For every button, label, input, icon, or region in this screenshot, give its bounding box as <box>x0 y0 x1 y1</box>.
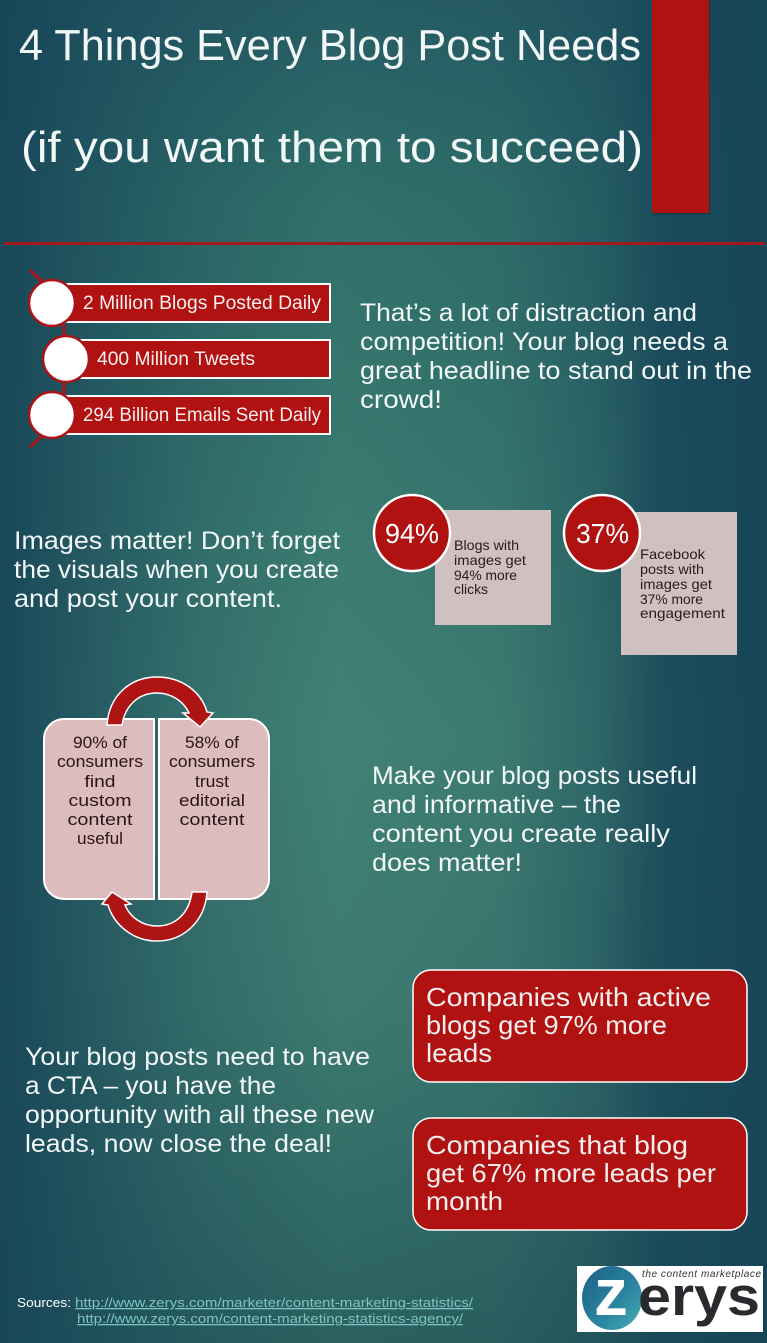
left panel: custom content: content <box>68 810 133 829</box>
right panel: editorial content: trust <box>195 772 229 791</box>
right panel: editorial content: consumers <box>169 752 255 771</box>
text block: call to action advice: Your blog posts need to have <box>25 1043 370 1071</box>
stat bar: tweets: 400 Million Tweets <box>97 349 255 370</box>
stat card: 94%: 94% <box>385 518 439 549</box>
stat card: 37%: 37% more <box>640 591 703 607</box>
title: (if you want them to succeed) <box>21 123 643 172</box>
stat bar: blogs <box>29 280 330 326</box>
stat card: 94%: clicks <box>454 581 488 597</box>
arrow: bottom clockwise <box>102 892 207 941</box>
text block: images advice: Images matter! Don’t forget <box>14 527 340 555</box>
text block: useful content advice: does matter! <box>372 849 522 877</box>
text block: headline advice: great headline to stand out in the <box>360 357 752 385</box>
sources: http://www.zerys.com/marketer/content-marketing-statistics/ <box>75 1295 473 1310</box>
text block: useful content advice: content you create really <box>372 820 671 848</box>
left panel: custom content: 90% of <box>73 733 127 752</box>
left panel: custom content <box>44 719 154 899</box>
logo: zerys: the content marketplace <box>642 1269 761 1280</box>
stat card: 37%: Facebook <box>640 546 706 562</box>
panel: volume statistics list <box>29 270 330 447</box>
text block: call to action advice <box>25 1043 375 1158</box>
callout: active blogs leads <box>413 970 747 1082</box>
stat card: 94%: Blogs with <box>454 537 519 553</box>
arrow: top clockwise <box>107 677 213 727</box>
stat card: 37%: engagement <box>640 605 725 621</box>
stat card: 37%: images get <box>640 576 712 592</box>
text block: headline advice <box>360 299 752 414</box>
title: 4 Things Every Blog Post Needs <box>19 21 641 70</box>
callout: active blogs leads: Companies with active <box>426 982 711 1012</box>
callout: monthly leads <box>413 1118 747 1230</box>
stat bar: tweets <box>43 336 330 382</box>
text block: headline advice: That’s a lot of distraction and <box>360 299 697 327</box>
diagram: content cycle <box>44 677 269 941</box>
text block: useful content advice: Make your blog posts useful <box>372 762 697 790</box>
logo: zerys <box>577 1255 763 1332</box>
right panel: editorial content: content <box>180 810 245 829</box>
stat card: 37%: posts with <box>640 561 704 577</box>
stat bar: emails <box>29 392 330 438</box>
left panel: custom content: custom <box>68 791 132 810</box>
text block: call to action advice: opportunity with all these new <box>25 1101 375 1129</box>
stat card: 37% <box>564 495 737 655</box>
sources: http://www.zerys.com/content-marketing-statistics-agency/ <box>77 1311 463 1326</box>
title <box>19 21 643 172</box>
stat card: 37%: 37% <box>576 518 629 549</box>
right panel: editorial content: 58% of <box>185 733 239 752</box>
stat bar: blogs: 2 Million Blogs Posted Daily <box>83 293 321 314</box>
text block: headline advice: crowd! <box>360 386 442 414</box>
callout: monthly leads: month <box>426 1186 503 1216</box>
red accent bar <box>652 0 709 213</box>
stat bar: emails: 294 Billion Emails Sent Daily <box>83 405 321 426</box>
text block: images advice <box>14 527 340 613</box>
text block: headline advice: competition! Your blog needs a <box>360 328 728 356</box>
right panel: editorial content <box>159 719 269 899</box>
stat card: 94%: images get <box>454 552 526 568</box>
left panel: custom content: find <box>84 772 116 791</box>
text block: call to action advice: leads, now close the deal! <box>25 1130 332 1158</box>
text block: useful content advice <box>372 762 697 877</box>
sources: Sources: <box>17 1295 71 1310</box>
right panel: editorial content: editorial <box>179 791 245 810</box>
header divider line <box>4 242 765 245</box>
left panel: custom content: useful <box>77 829 123 848</box>
callout: active blogs leads: leads <box>426 1038 492 1068</box>
sources <box>17 1295 473 1326</box>
callout: monthly leads: Companies that blog <box>426 1130 688 1160</box>
text block: images advice: and post your content. <box>14 585 282 613</box>
text block: images advice: the visuals when you create <box>14 556 339 584</box>
callout: active blogs leads: blogs get 97% more <box>426 1010 667 1040</box>
stat card: 94%: 94% more <box>454 567 517 583</box>
text block: useful content advice: and informative – the <box>372 791 621 819</box>
callout: monthly leads: get 67% more leads per <box>426 1158 716 1188</box>
logo: zerys: z <box>594 1255 628 1329</box>
stat card: 94% <box>374 495 551 625</box>
left panel: custom content: consumers <box>57 752 143 771</box>
logo: zerys: erys <box>638 1265 760 1327</box>
text block: call to action advice: a CTA – you have the <box>25 1072 276 1100</box>
